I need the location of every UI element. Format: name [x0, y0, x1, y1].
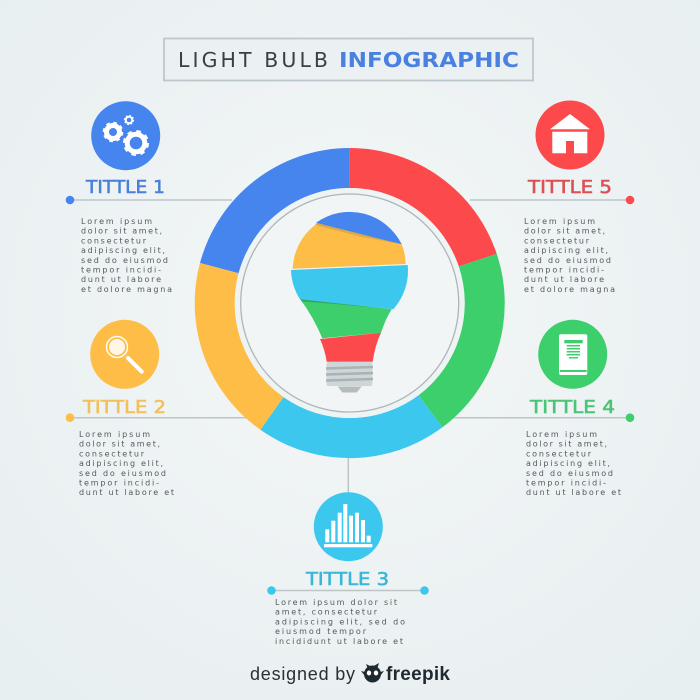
text block 1: adipiscing elit, [81, 246, 165, 255]
dots: cyan [267, 586, 429, 595]
text block 4: Lorem ipsum [526, 430, 597, 439]
bulb: red band [320, 333, 381, 362]
text block 4 [526, 430, 621, 497]
text block 4: adipiscing elit, [526, 459, 610, 468]
text block 4: sed do eiusmod [526, 469, 613, 478]
bulb: blue top [316, 212, 402, 244]
text block 1: dunt ut labore [81, 275, 161, 284]
light bulb [291, 212, 408, 392]
text block 5: consectetur [524, 236, 590, 245]
text block 1: sed do eiusmod [81, 256, 168, 265]
heading: tittle 1: TITTLE 1 [85, 177, 165, 198]
bulb: screw base [326, 362, 373, 392]
text block 5: dolor sit amet, [524, 227, 605, 236]
text block 4: dolor sit amet, [526, 440, 607, 449]
dot: blue [66, 196, 74, 204]
text block 1: dolor sit amet, [81, 227, 162, 236]
text block 4: consectetur [526, 449, 592, 458]
text block 4: tempor incidi- [526, 478, 606, 488]
panel: title 2 [66, 320, 174, 497]
heading: tittle 3: TITTLE 3 [305, 569, 389, 590]
panel: title 1 [66, 101, 172, 294]
dot: green [626, 413, 634, 422]
panel: title 5 [524, 100, 634, 294]
text block 1: tempor incidi- [81, 266, 161, 274]
text block 3: amet, consectetur [275, 608, 378, 617]
text block 3: eiusmod tempor [275, 627, 367, 636]
text block 1 [81, 217, 172, 294]
text block 3 [275, 598, 405, 646]
inner circle [235, 188, 465, 418]
icon: bar chart [314, 492, 383, 561]
text block 5: Lorem ipsum [524, 217, 595, 226]
text block 2: dolor sit amet, [79, 440, 160, 449]
icon: book [538, 320, 607, 389]
text block 2: consectetur [79, 449, 145, 458]
donut ring [195, 148, 505, 458]
icon: gears [91, 101, 160, 170]
heading: tittle 2: TITTLE 2 [82, 397, 166, 418]
text block 5: tempor incidi- [524, 266, 604, 274]
footer: freepik credit [250, 663, 450, 685]
text block 5: adipiscing elit, [524, 246, 608, 255]
text block 2: tempor incidi- [79, 478, 159, 488]
text block 4: dunt ut labore et [526, 488, 621, 497]
text block 2: sed do eiusmod [79, 469, 166, 478]
text block 1: et dolore magna [81, 285, 172, 294]
title: INFOGRAPHIC [339, 48, 519, 72]
text block 2: adipiscing elit, [79, 459, 163, 468]
connector lines [70, 200, 630, 590]
icon: house [536, 100, 604, 170]
text block 1: Lorem ipsum [81, 217, 152, 226]
text block 2 [79, 430, 174, 497]
icon: freepik logo [361, 663, 384, 682]
footer: freepik credit: designed by [250, 664, 355, 684]
text block 3: adipiscing elit, sed do [275, 617, 405, 626]
icon: magnifier [90, 320, 159, 389]
text block 5: sed do eiusmod [524, 256, 611, 265]
text block 5: et dolore magna [524, 285, 615, 294]
bulb: cyan band [291, 265, 408, 309]
text block 1: consectetur [81, 236, 147, 245]
text block 5 [524, 217, 615, 294]
panel: title 4 [526, 320, 634, 497]
panel: title 3 [267, 492, 429, 646]
bulb: green band [300, 299, 392, 338]
heading: tittle 5: TITTLE 5 [527, 177, 612, 198]
title: LIGHT BULB [178, 48, 328, 72]
text block 3: Lorem ipsum dolor sit [275, 598, 397, 607]
dot: yellow [66, 413, 74, 422]
heading: tittle 4: TITTLE 4 [529, 397, 615, 418]
title [164, 38, 533, 80]
text block 3: incididunt ut labore et [275, 637, 403, 646]
text block 2: Lorem ipsum [79, 430, 150, 439]
text block 5: dunt ut labore [524, 275, 604, 284]
text block 2: dunt ut labore et [79, 488, 174, 497]
dot: red [626, 196, 634, 204]
footer: freepik credit: freepik [386, 664, 450, 685]
bulb: yellow band [293, 225, 406, 269]
